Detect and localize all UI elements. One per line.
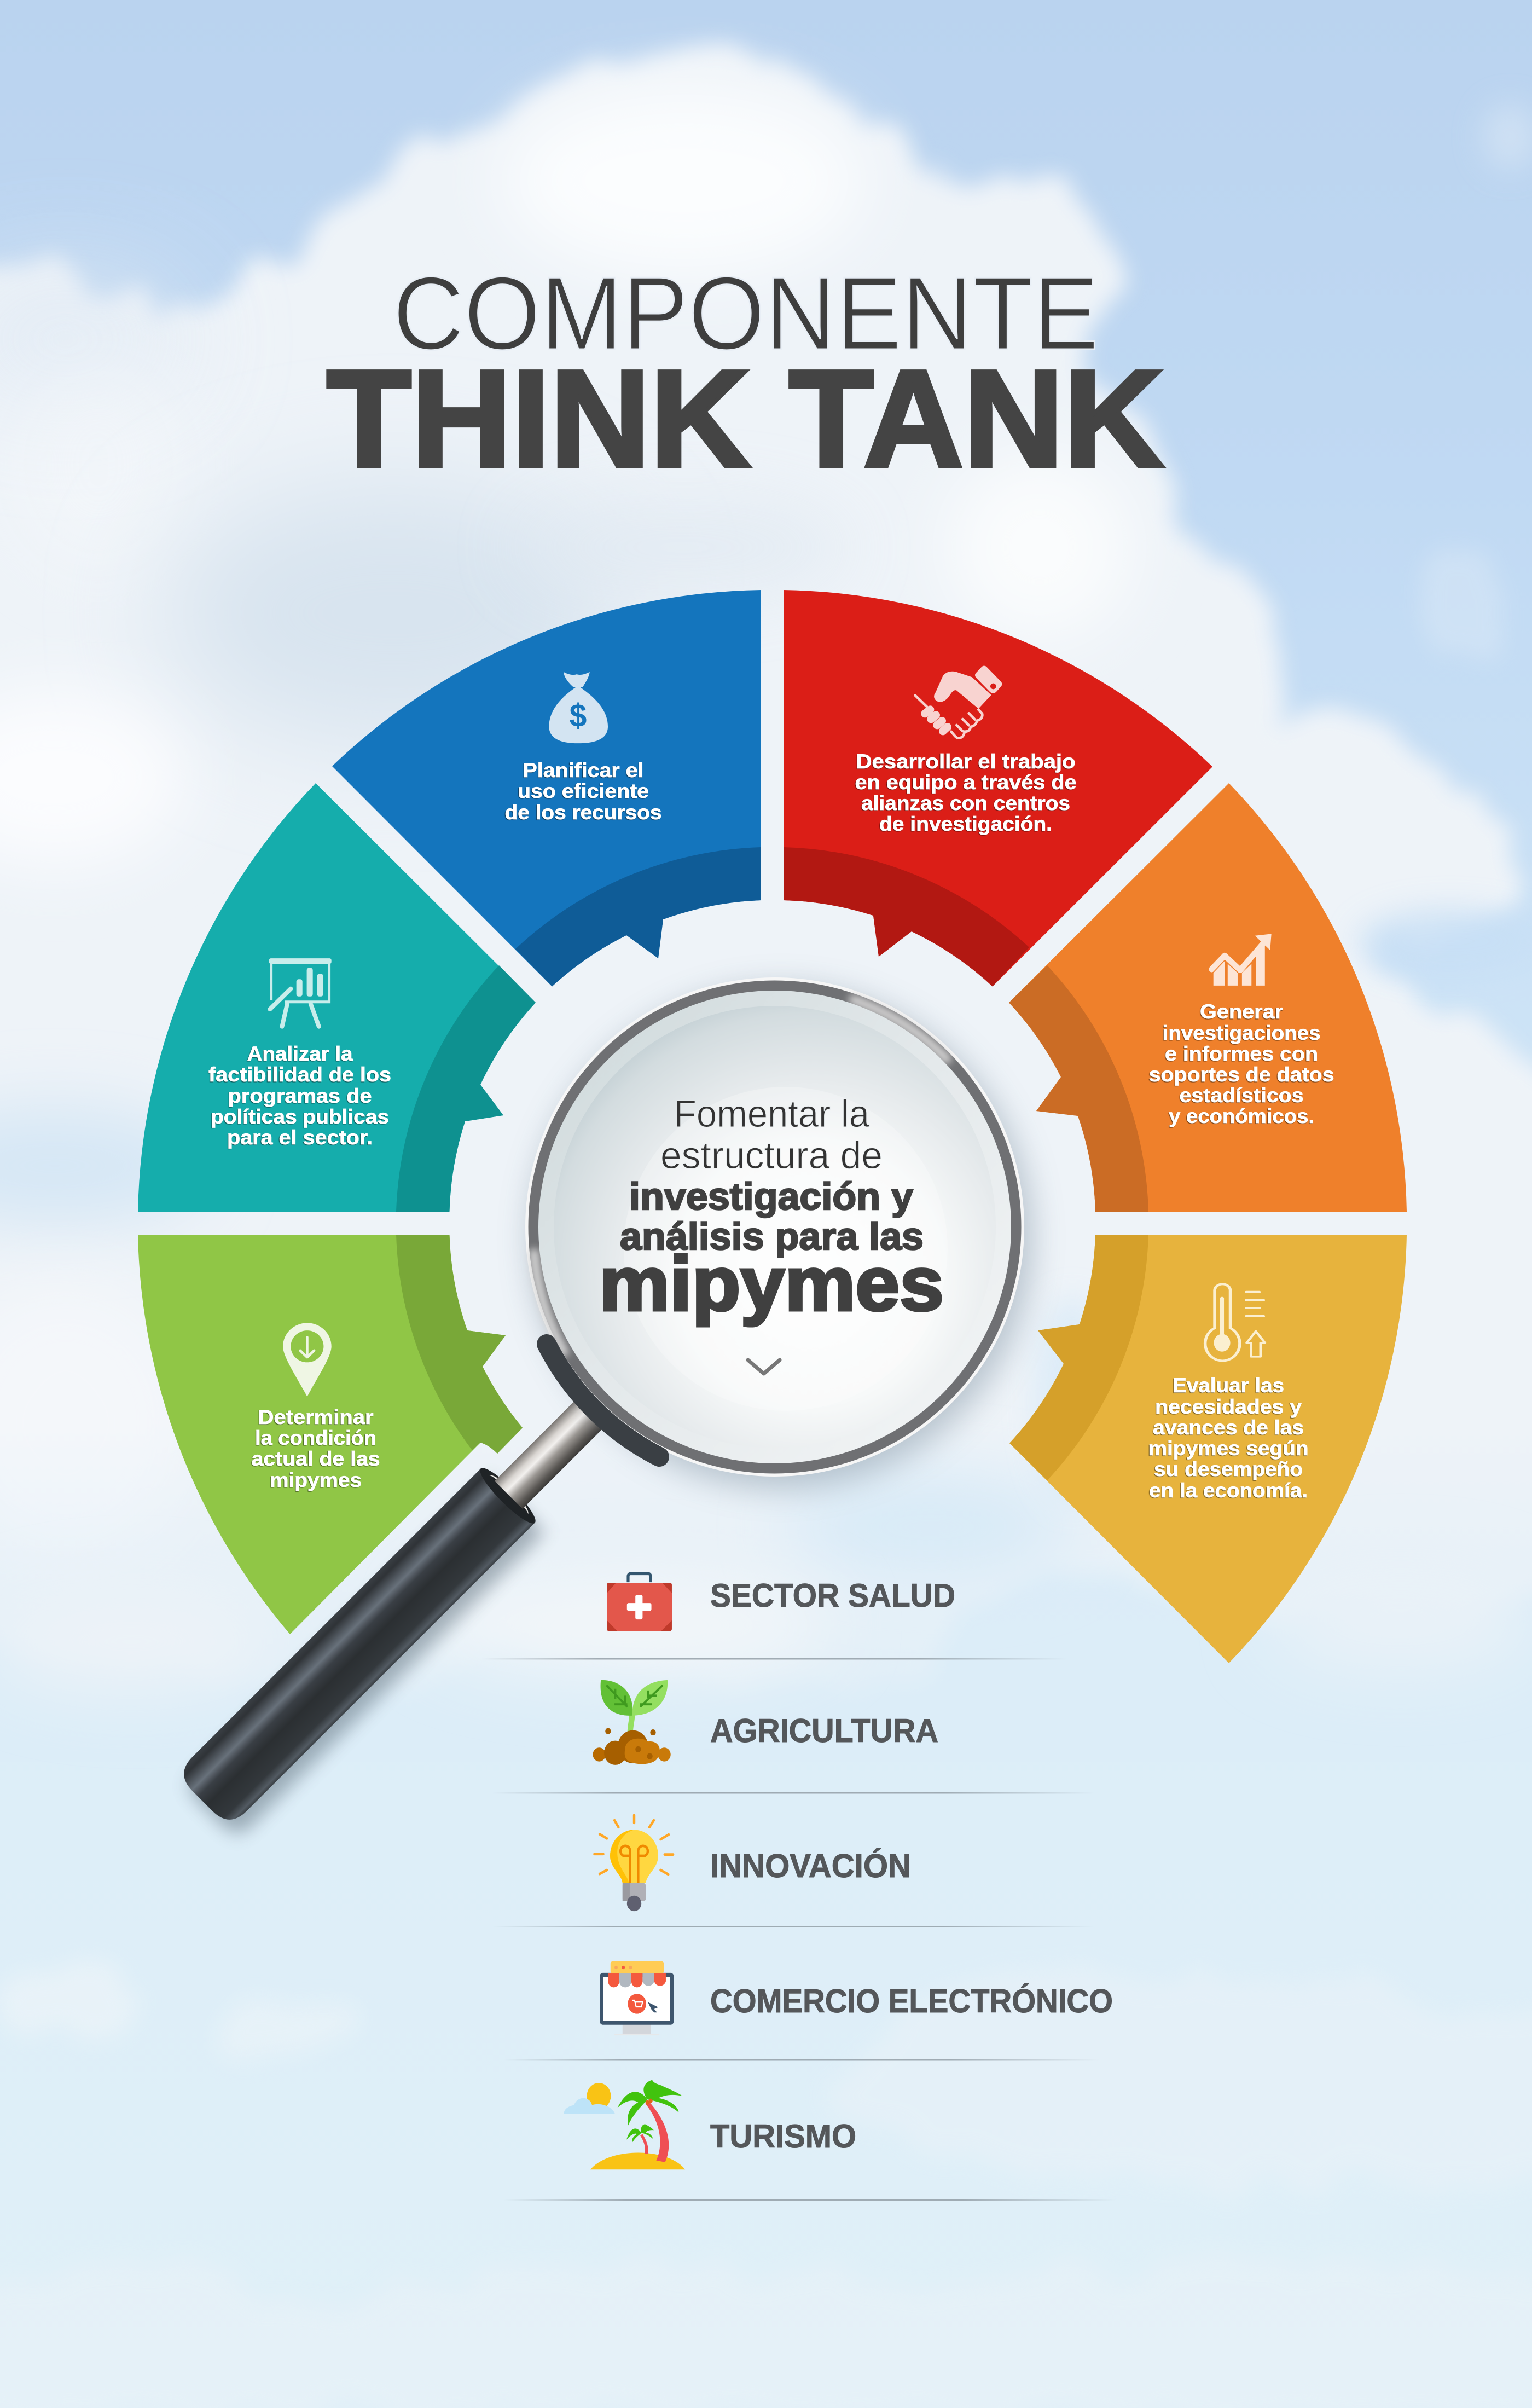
icon: growth chart <box>1212 934 1272 986</box>
sector: comercio electrónico <box>602 1961 1113 2035</box>
center text <box>599 1092 944 1327</box>
text: evaluar: necesidades y <box>1155 1396 1302 1418</box>
text: generar: e informes con <box>1165 1043 1318 1065</box>
text: planificar: de los recursos <box>504 801 662 824</box>
text: generar: Generar <box>1200 1000 1283 1023</box>
text: evaluar: mipymes según <box>1148 1437 1309 1460</box>
text: desarrollar: en equipo a través de <box>855 771 1077 794</box>
text: determinar: Determinar <box>258 1406 373 1428</box>
panel: analizar (teal) <box>138 783 536 1212</box>
icon: presentation board <box>269 958 332 1027</box>
magnifying glass <box>173 977 1032 1840</box>
icon: handshake <box>915 666 1002 738</box>
lens bracket <box>547 1344 659 1457</box>
icon: chevron down <box>748 1360 780 1374</box>
sector: agricultura: AGRICULTURA <box>710 1712 938 1749</box>
list: sectors <box>481 1573 1116 2201</box>
title <box>327 256 1164 496</box>
text: analizar: programas de <box>228 1085 372 1107</box>
sector: salud <box>607 1573 955 1631</box>
text: analizar <box>208 1043 391 1149</box>
text: determinar: mipymes <box>270 1469 362 1491</box>
lens glass <box>538 991 1011 1463</box>
text: evaluar <box>1148 1374 1309 1502</box>
text: generar: estadísticos <box>1180 1084 1303 1107</box>
icon: money bag: $ <box>570 697 587 734</box>
center text: investigación y <box>629 1175 913 1218</box>
text: analizar: para el sector. <box>227 1126 373 1149</box>
text: evaluar: avances de las <box>1153 1416 1304 1439</box>
sector: agricultura <box>593 1680 938 1765</box>
handle <box>173 1387 626 1840</box>
icon: location pin <box>283 1323 332 1397</box>
text: evaluar: Evaluar las <box>1173 1374 1284 1397</box>
lens shadow <box>531 987 1032 1489</box>
sector: salud: SECTOR SALUD <box>710 1577 955 1614</box>
sector: turismo <box>564 2080 856 2169</box>
text: generar: y económicos. <box>1169 1105 1314 1127</box>
text: analizar: políticas publicas <box>211 1105 389 1128</box>
text: desarrollar <box>855 750 1077 835</box>
text: desarrollar: Desarrollar el trabajo <box>856 750 1076 773</box>
text: generar: investigaciones <box>1162 1022 1321 1044</box>
text: determinar: la condición <box>255 1427 376 1449</box>
text: analizar: Analizar la <box>247 1043 353 1065</box>
panel: desarrollar (red) <box>784 590 1212 986</box>
text: determinar: actual de las <box>252 1448 380 1470</box>
center text: Fomentar la <box>674 1092 869 1135</box>
panel: generar (orange) <box>1009 783 1407 1212</box>
text: generar: soportes de datos <box>1149 1063 1334 1086</box>
text: planificar: uso eficiente <box>518 780 649 802</box>
text: determinar <box>252 1406 380 1491</box>
center text: estructura de <box>660 1134 883 1177</box>
text: desarrollar: alianzas con centros <box>861 792 1070 814</box>
title line 2: THINK TANK <box>327 342 1164 496</box>
panel: evaluar (yellow) <box>1009 1235 1407 1663</box>
text: desarrollar: de investigación. <box>879 813 1052 835</box>
panel: determinar (green) <box>138 1235 523 1634</box>
panel: planificar (blue) <box>332 590 761 986</box>
text: generar <box>1149 1000 1334 1127</box>
text: evaluar: su desempeño <box>1154 1458 1303 1480</box>
sector: comercio electrónico: COMERCIO ELECTRÓNICO <box>710 1983 1113 2019</box>
center text: análisis para las <box>620 1215 924 1258</box>
text: planificar <box>504 759 662 824</box>
text: planificar: Planificar el <box>523 759 643 782</box>
sector: innovación: INNOVACIÓN <box>710 1848 911 1884</box>
text: analizar: factibilidad de los <box>208 1063 391 1086</box>
icon: thermometer <box>1205 1284 1265 1361</box>
sector: innovación <box>594 1815 911 1911</box>
title line 1: COMPONENTE <box>393 256 1099 372</box>
icon: money bag <box>549 672 608 743</box>
lens rim <box>525 977 1024 1477</box>
sector: turismo: TURISMO <box>710 2118 856 2155</box>
center text: mipymes <box>599 1241 944 1327</box>
text: evaluar: en la economía. <box>1149 1479 1308 1502</box>
